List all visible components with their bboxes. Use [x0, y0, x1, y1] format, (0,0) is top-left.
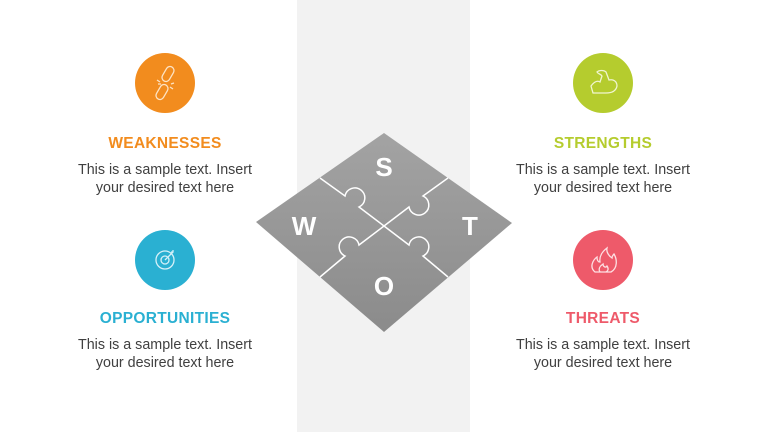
text: threats: your desired text here [534, 355, 672, 371]
text: opportunities: your desired text here [96, 355, 234, 371]
heading: weaknesses: WEAKNESSES [108, 135, 222, 152]
heading: opportunities: OPPORTUNITIES [100, 310, 230, 327]
text: weaknesses: your desired text here [96, 180, 234, 196]
icon: fire [573, 230, 633, 290]
icon: target [135, 230, 195, 290]
panel: threats [516, 230, 690, 371]
text: threats: This is a sample text. Insert [516, 337, 690, 353]
letter O: O [374, 271, 394, 301]
text: weaknesses: This is a sample text. Insert [78, 162, 252, 178]
letter T: T [462, 211, 478, 241]
icon: broken chain [135, 53, 195, 113]
icon: muscle arm [573, 53, 633, 113]
panel: strengths [516, 53, 690, 196]
text: opportunities: This is a sample text. Insert [78, 337, 252, 353]
text: strengths [516, 162, 690, 196]
text: weaknesses [78, 162, 252, 196]
panel: weaknesses [78, 53, 252, 196]
text: threats [516, 337, 690, 371]
heading: threats: THREATS [566, 310, 640, 327]
text: opportunities [78, 337, 252, 371]
text: strengths: This is a sample text. Insert [516, 162, 690, 178]
panel: opportunities [78, 230, 252, 371]
letter W: W [292, 211, 317, 241]
text: strengths: your desired text here [534, 180, 672, 196]
heading: strengths: STRENGTHS [554, 135, 652, 152]
letter S: S [375, 152, 393, 182]
